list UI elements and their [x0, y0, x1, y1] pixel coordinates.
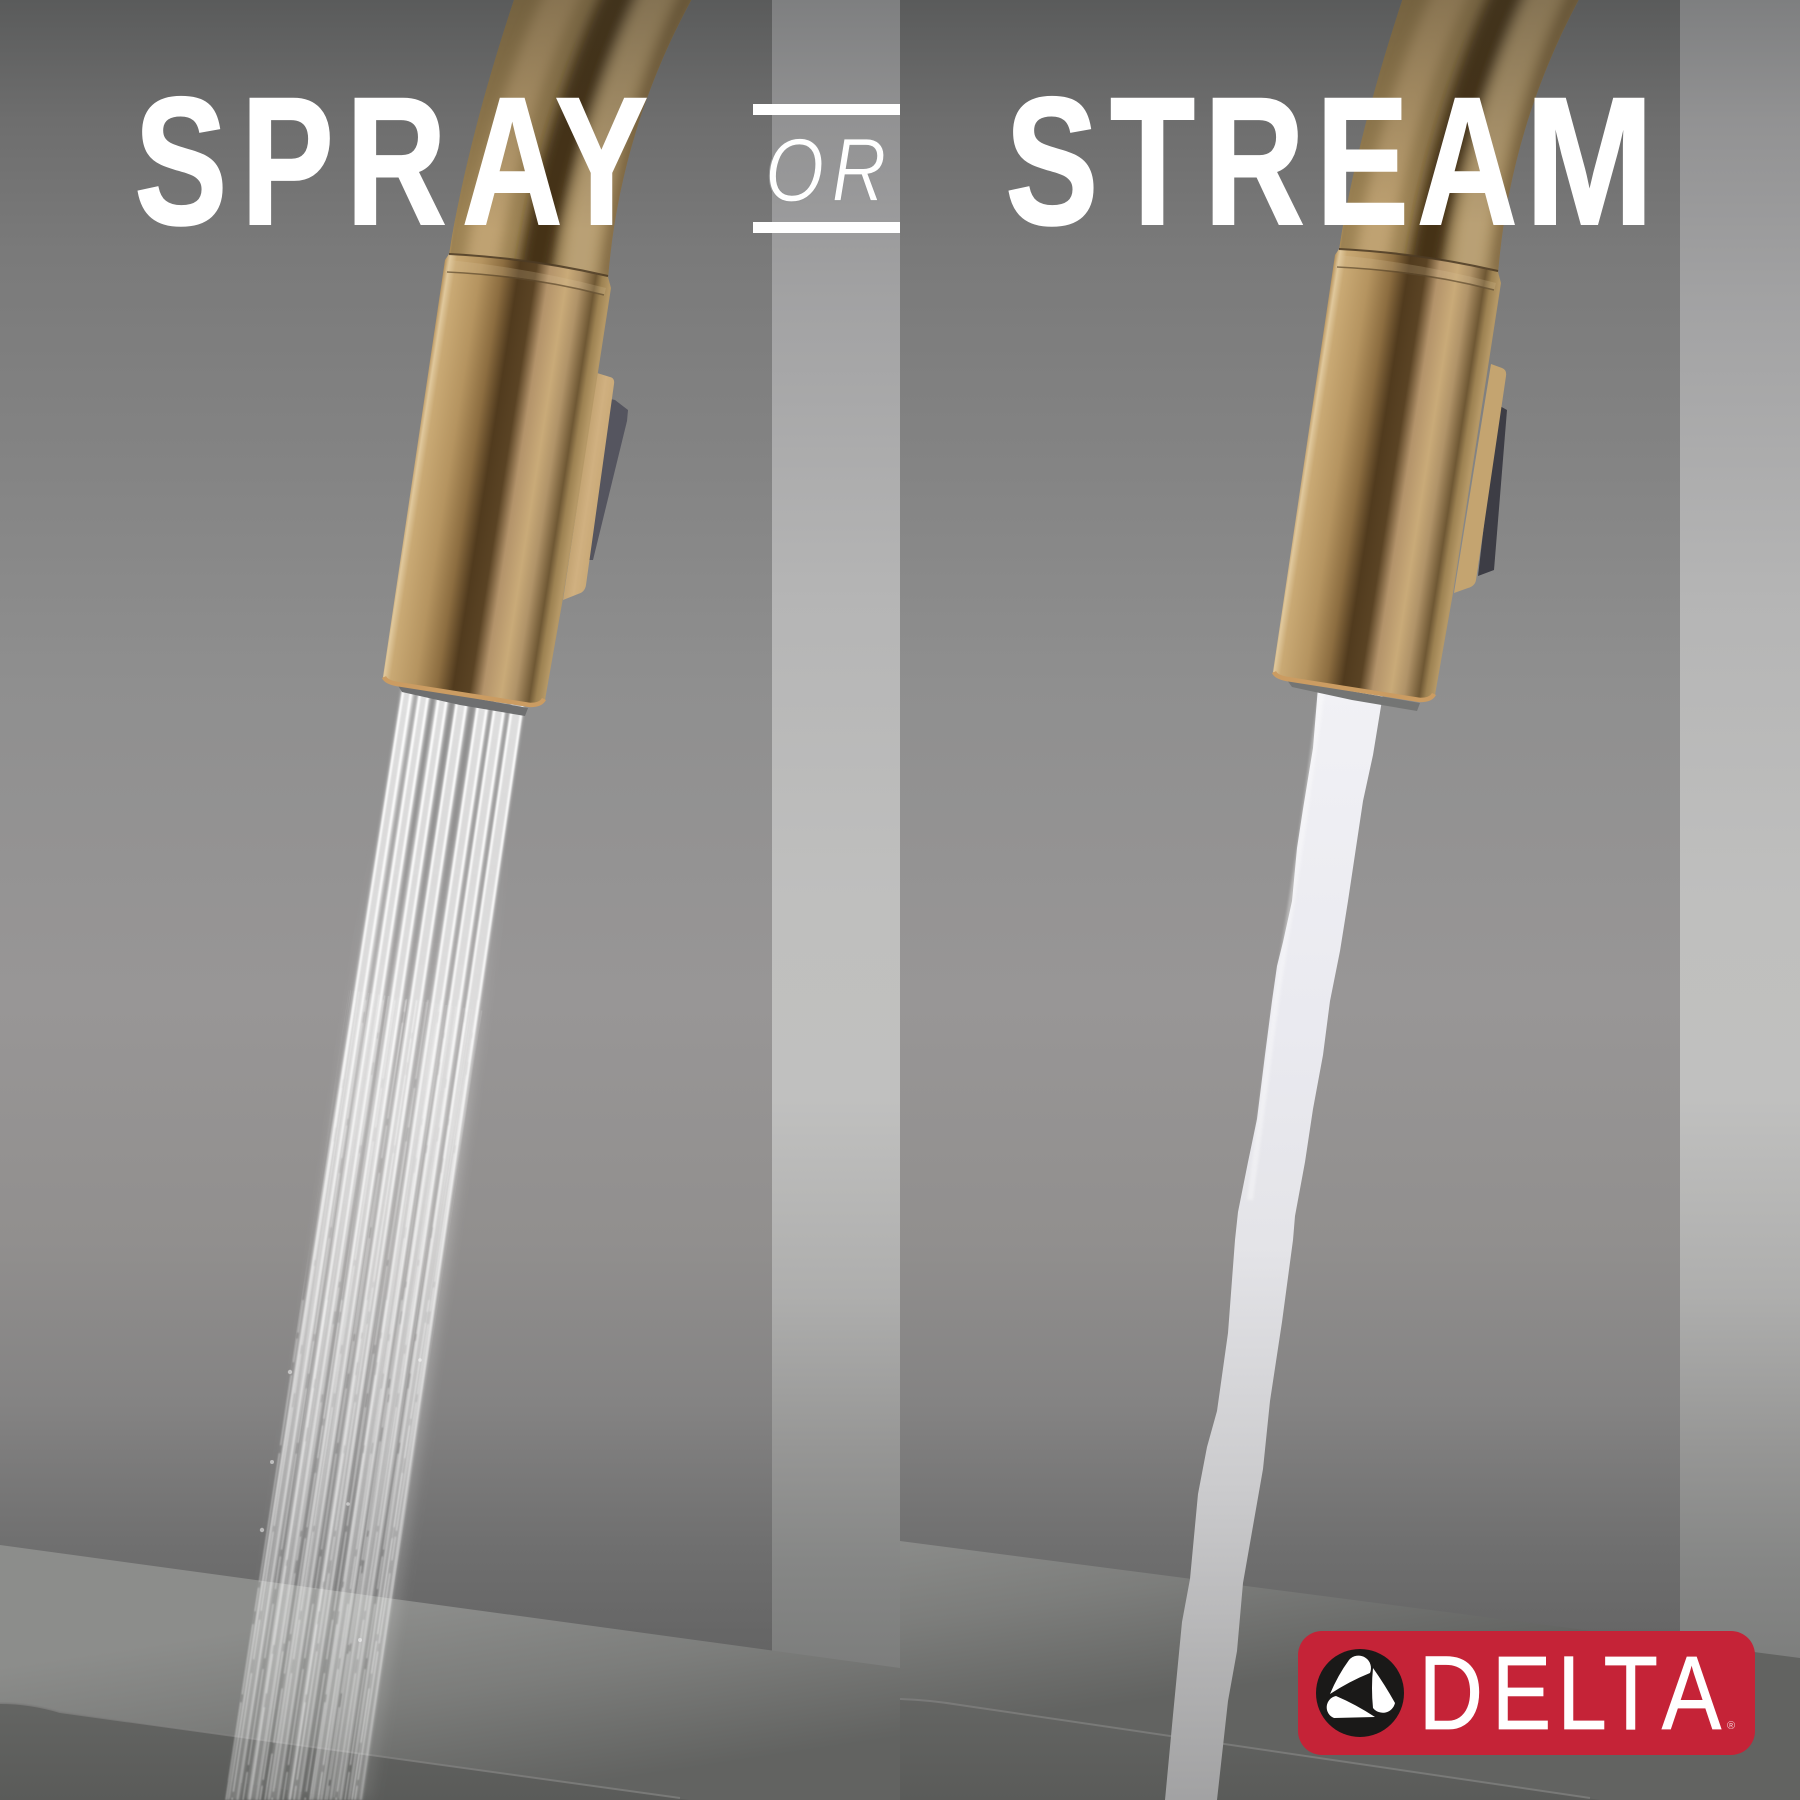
spray trigger blade	[585, 398, 628, 560]
brushed gold body	[1273, 0, 1600, 702]
divider word: OR	[753, 104, 900, 233]
sink rim highlight	[900, 1699, 1590, 1798]
water spray	[226, 688, 522, 1800]
spray main jets	[228, 688, 522, 1800]
icon: Delta mark	[1316, 1649, 1404, 1737]
nozzle face	[397, 684, 528, 716]
stream trigger	[1454, 364, 1506, 593]
registered mark: ®	[1727, 1720, 1735, 1732]
faucet: spray head	[383, 0, 710, 716]
spray droplets	[260, 1358, 422, 1642]
panel: stream background	[900, 0, 1800, 1800]
faucet: stream head	[1273, 0, 1600, 711]
spray trigger	[563, 373, 614, 600]
water stream	[1165, 687, 1383, 1800]
spray glow	[234, 830, 505, 1800]
countertop	[900, 1541, 1800, 1800]
spray bundles	[234, 689, 517, 1800]
nozzle face	[1287, 680, 1420, 711]
logo: Delta badge	[1298, 1631, 1755, 1755]
spray streak texture	[227, 990, 483, 1800]
title word: STREAM: M	[1525, 59, 1654, 263]
sink rim highlight	[0, 1703, 680, 1798]
divider word: OR: OR	[765, 120, 886, 220]
stream trigger blade	[1478, 405, 1507, 576]
title word: SPRAY: SPRAY	[134, 60, 648, 263]
wordmark: DELTA	[1419, 1634, 1721, 1752]
sink basin	[0, 1703, 689, 1800]
countertop	[0, 1545, 900, 1800]
spray broken fine jets	[226, 1000, 478, 1800]
title word: STREAM: STREA	[1005, 60, 1518, 263]
panel: spray background	[0, 0, 900, 1800]
brushed gold body	[383, 0, 710, 707]
sink basin	[900, 1699, 1600, 1800]
